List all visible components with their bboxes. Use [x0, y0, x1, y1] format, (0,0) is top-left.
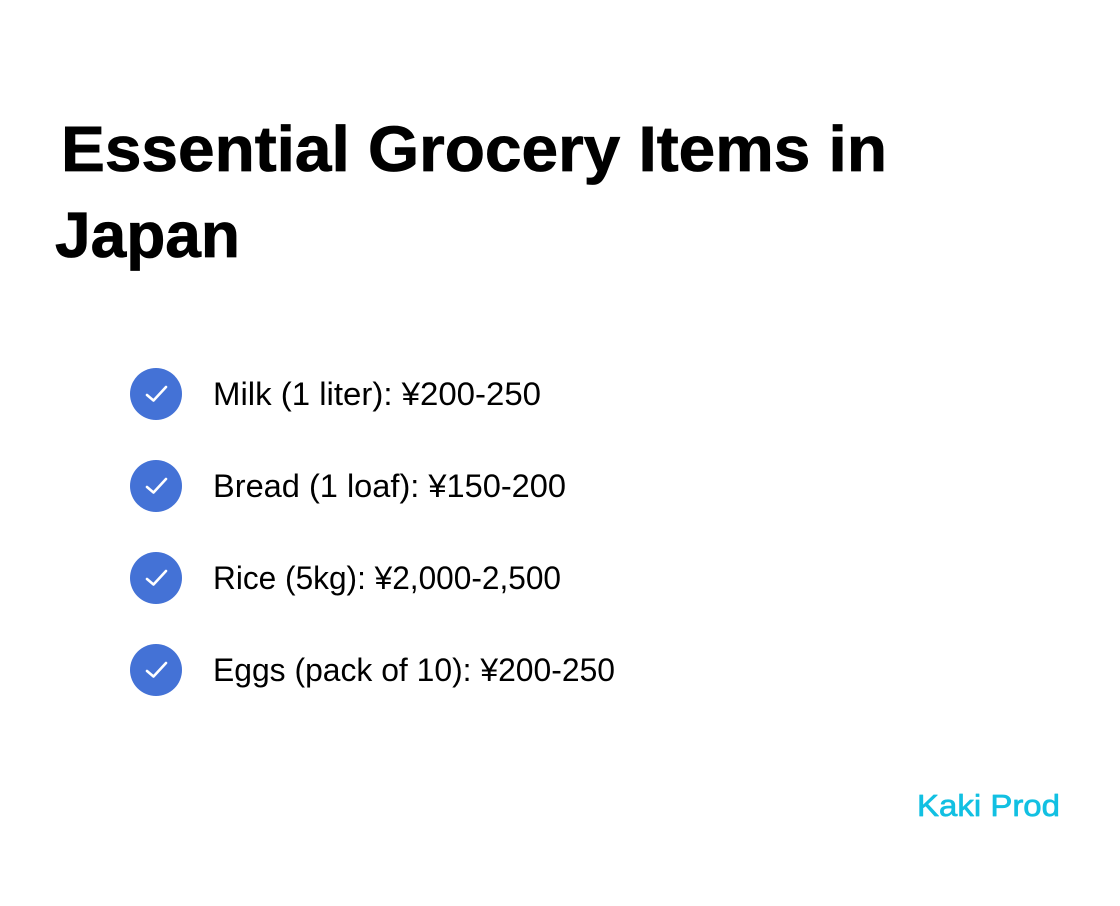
list item: bread: Bread (1 loaf): ¥150-200 [213, 468, 566, 504]
title [55, 113, 887, 271]
checklist [130, 368, 615, 696]
title: Japan [55, 199, 240, 271]
title: Essential Grocery Items in [61, 113, 887, 185]
list item: milk: Milk (1 liter): ¥200-250 [213, 376, 541, 412]
list item: bread [130, 460, 566, 512]
list item: eggs [130, 644, 615, 696]
logo: Kaki Prod: Kaki Prod [917, 788, 1060, 823]
list item: rice [130, 552, 561, 604]
list item: rice: Rice (5kg): ¥2,000-2,500 [213, 560, 561, 596]
list item: milk [130, 368, 541, 420]
list item: eggs: Eggs (pack of 10): ¥200-250 [213, 652, 615, 688]
